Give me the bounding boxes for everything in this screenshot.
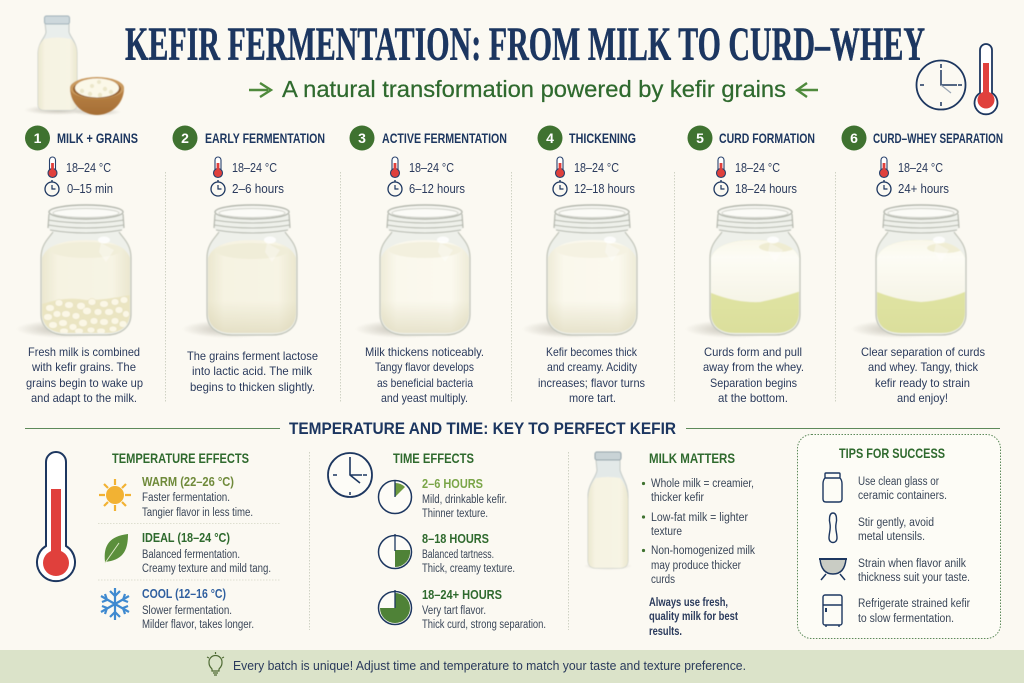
step 5: curd formation: away from the whey. <box>703 360 804 374</box>
step 3: active fermentation: 18–24 °C <box>409 161 454 175</box>
text: 18-24+ hours: 18–24+ HOURS <box>422 587 502 602</box>
step 6: curd-whey separation: kefir ready to strain <box>875 376 970 390</box>
step dividers <box>166 172 836 402</box>
step 3: active fermentation: and yeast multiply. <box>381 391 468 405</box>
icon: leaf <box>105 534 128 563</box>
warm text <box>142 474 253 519</box>
step 5: curd formation: Curds form and pull <box>704 345 802 359</box>
text: 8-18 hours <box>422 531 515 575</box>
icon: clock 8-18 hours <box>378 534 412 568</box>
icon: jar <box>823 473 842 502</box>
step 5: curd formation <box>685 126 815 405</box>
step 4: thickening: increases; flavor turns <box>538 376 645 390</box>
panel: temperature effects <box>37 450 280 631</box>
text: 18-24+ hours: Thick curd, strong separation. <box>422 619 546 631</box>
ideal text: Creamy texture and mild tang. <box>142 563 271 575</box>
step 6: curd-whey separation: 18–24 °C <box>898 161 943 175</box>
step 5: curd formation: at the bottom. <box>718 391 788 405</box>
icon: milk bottle <box>584 452 632 570</box>
milk note: results. <box>649 626 682 638</box>
step 2: early fermentation: 18–24 °C <box>232 161 277 175</box>
heading: milk matters: MILK MATTERS <box>649 450 735 466</box>
icon: clock and thermometer <box>916 44 998 114</box>
step 1: milk + grains: with kefir grains. The <box>31 360 136 374</box>
icon: spoon <box>829 513 837 542</box>
text: 2-6 hours: 2–6 HOURS <box>422 476 483 491</box>
bullet list: texture <box>651 526 682 538</box>
icon: sun <box>99 479 131 511</box>
cool text: COOL (12–16 °C) <box>142 586 226 601</box>
step 1: milk + grains: 1 <box>34 130 42 146</box>
icon: strainer <box>819 559 847 580</box>
step 1: milk + grains: 18–24 °C <box>66 161 111 175</box>
text: 18-24+ hours: Very tart flavor. <box>422 605 486 617</box>
cool text: Slower fermentation. <box>142 605 232 617</box>
step 2: early fermentation: 2 <box>181 130 189 146</box>
footer text: Every batch is unique! Adjust time and temperature to match your taste and texture preference. <box>233 659 746 673</box>
tip 4: Refrigerate strained kefir <box>858 598 970 610</box>
step 5: curd formation: 18–24 hours <box>735 182 797 196</box>
icon: snowflake <box>101 588 129 620</box>
tip 2: metal utensils. <box>858 531 925 543</box>
step 3: active fermentation <box>350 126 507 405</box>
icon: clock 2-6 hours <box>378 480 412 514</box>
step 3: active fermentation: as beneficial bacteria <box>377 376 473 390</box>
heading: tips for success: TIPS FOR SUCCESS <box>839 445 945 461</box>
panel dividers <box>310 452 568 630</box>
warm text: Tangier flavor in less time. <box>142 507 253 519</box>
step 5: curd formation: 5 <box>696 130 704 146</box>
bullet list: Whole milk = creamier, <box>651 478 754 490</box>
icon: large clock <box>328 453 372 497</box>
bullet list: curds <box>651 574 675 586</box>
text: 2-6 hours: Thinner texture. <box>422 508 488 520</box>
step 2: early fermentation: into lactic acid. The milk <box>192 364 313 378</box>
step 2: early fermentation: 2–6 hours <box>232 182 284 196</box>
step 6: curd-whey separation <box>842 126 1003 405</box>
step 1: milk + grains: MILK + GRAINS <box>57 130 138 146</box>
step 2: early fermentation <box>172 126 325 394</box>
tip 2: Stir gently, avoid <box>858 517 934 529</box>
icon: light bulb <box>207 652 224 675</box>
step 4: thickening: Kefir becomes thick <box>546 345 638 359</box>
tip 3: thickness suit your taste. <box>858 572 970 584</box>
step 1: milk + grains: and adapt to the milk. <box>31 391 137 405</box>
bullet list: Low-fat milk = lighter <box>651 512 748 524</box>
heading: temperature effects: TEMPERATURE EFFECTS <box>112 450 249 466</box>
text: 18-24+ hours <box>422 587 546 631</box>
step 4: thickening: THICKENING <box>569 130 636 146</box>
heading: time effects: TIME EFFECTS <box>393 450 474 466</box>
bullet list: thicker kefir <box>651 492 704 504</box>
bullet list <box>642 478 755 586</box>
step 6: curd-whey separation: 6 <box>850 130 858 146</box>
warm text: WARM (22–26 °C) <box>142 474 234 489</box>
bullet list: may produce thicker <box>651 560 741 572</box>
step 6: curd-whey separation: and enjoy! <box>897 391 948 405</box>
cool text: Milder flavor, takes longer. <box>142 619 254 631</box>
text: 8-18 hours: Balanced tartness. <box>422 549 494 561</box>
panel: milk matters <box>584 450 755 638</box>
step 4: thickening <box>522 126 645 405</box>
step 3: active fermentation: ACTIVE FERMENTATION <box>382 130 507 146</box>
tip 1 <box>858 476 947 502</box>
milk note: Always use fresh, <box>649 597 728 609</box>
step 6: curd-whey separation: Clear separation of curds <box>861 345 985 359</box>
step 3: active fermentation: 6–12 hours <box>409 182 465 196</box>
step 4: thickening: 12–18 hours <box>574 182 635 196</box>
step 3: active fermentation: 3 <box>358 130 366 146</box>
tip 4 <box>858 598 970 625</box>
step 2: early fermentation: The grains ferment lactose <box>187 349 318 363</box>
step 4: thickening: 4 <box>546 130 554 146</box>
tip 2 <box>858 517 934 543</box>
subtitle: A natural transformation powered by kefir grains <box>282 76 786 102</box>
milk note <box>649 597 738 638</box>
tip 3: Strain when flavor anilk <box>858 558 966 570</box>
text: 2-6 hours <box>422 476 507 520</box>
step 4: thickening: and creamy. Acidity <box>547 360 637 374</box>
step 3: active fermentation: Milk thickens noticeably. <box>365 345 484 359</box>
step 5: curd formation: 18–24 °C <box>735 161 780 175</box>
illustration: milk bottle and bowl of kefir grains <box>24 16 124 116</box>
icon: fridge <box>823 595 842 627</box>
step 5: curd formation: CURD FORMATION <box>719 130 815 146</box>
ideal text: Balanced fermentation. <box>142 549 240 561</box>
icon: clock 18-24 hours <box>378 590 412 624</box>
step 6: curd-whey separation: and whey. Tangy, thick <box>868 360 979 374</box>
step 3: active fermentation: Tangy flavor develops <box>375 360 474 374</box>
tip 1: ceramic containers. <box>858 490 947 502</box>
footer band <box>0 650 1024 683</box>
ideal text <box>142 530 271 575</box>
milk note: quality milk for best <box>649 611 738 623</box>
warm text: Faster fermentation. <box>142 492 230 504</box>
ideal text: IDEAL (18–24 °C) <box>142 530 230 545</box>
step 1: milk + grains: Fresh milk is combined <box>28 345 140 359</box>
step 5: curd formation: Separation begins <box>710 376 797 390</box>
step 2: early fermentation: begins to thicken slightly. <box>190 380 315 394</box>
text: 8-18 hours: Thick, creamy texture. <box>422 563 515 575</box>
step 4: thickening: 18–24 °C <box>574 161 619 175</box>
text: 2-6 hours: Mild, drinkable kefir. <box>422 494 507 506</box>
tip 4: to slow fermentation. <box>858 613 954 625</box>
step 2: early fermentation: EARLY FERMENTATION <box>205 130 325 146</box>
bullet list: Non-homogenized milk <box>651 545 755 557</box>
cool text <box>142 586 254 631</box>
section heading: TEMPERATURE AND TIME: KEY TO PERFECT KEFIR <box>289 420 676 438</box>
panel: tips for success <box>798 434 1000 638</box>
panel: time effects <box>328 450 546 631</box>
icon: large thermometer <box>37 452 75 581</box>
text: 8-18 hours: 8–18 HOURS <box>422 531 489 546</box>
tip 3 <box>858 558 970 584</box>
step 1: milk + grains <box>16 126 143 405</box>
tip 1: Use clean glass or <box>858 476 939 488</box>
step 1: milk + grains: grains begin to wake up <box>26 376 143 390</box>
step 1: milk + grains: 0–15 min <box>67 182 113 196</box>
step 4: thickening: more tart. <box>569 391 616 405</box>
step 6: curd-whey separation: 24+ hours <box>898 182 949 196</box>
